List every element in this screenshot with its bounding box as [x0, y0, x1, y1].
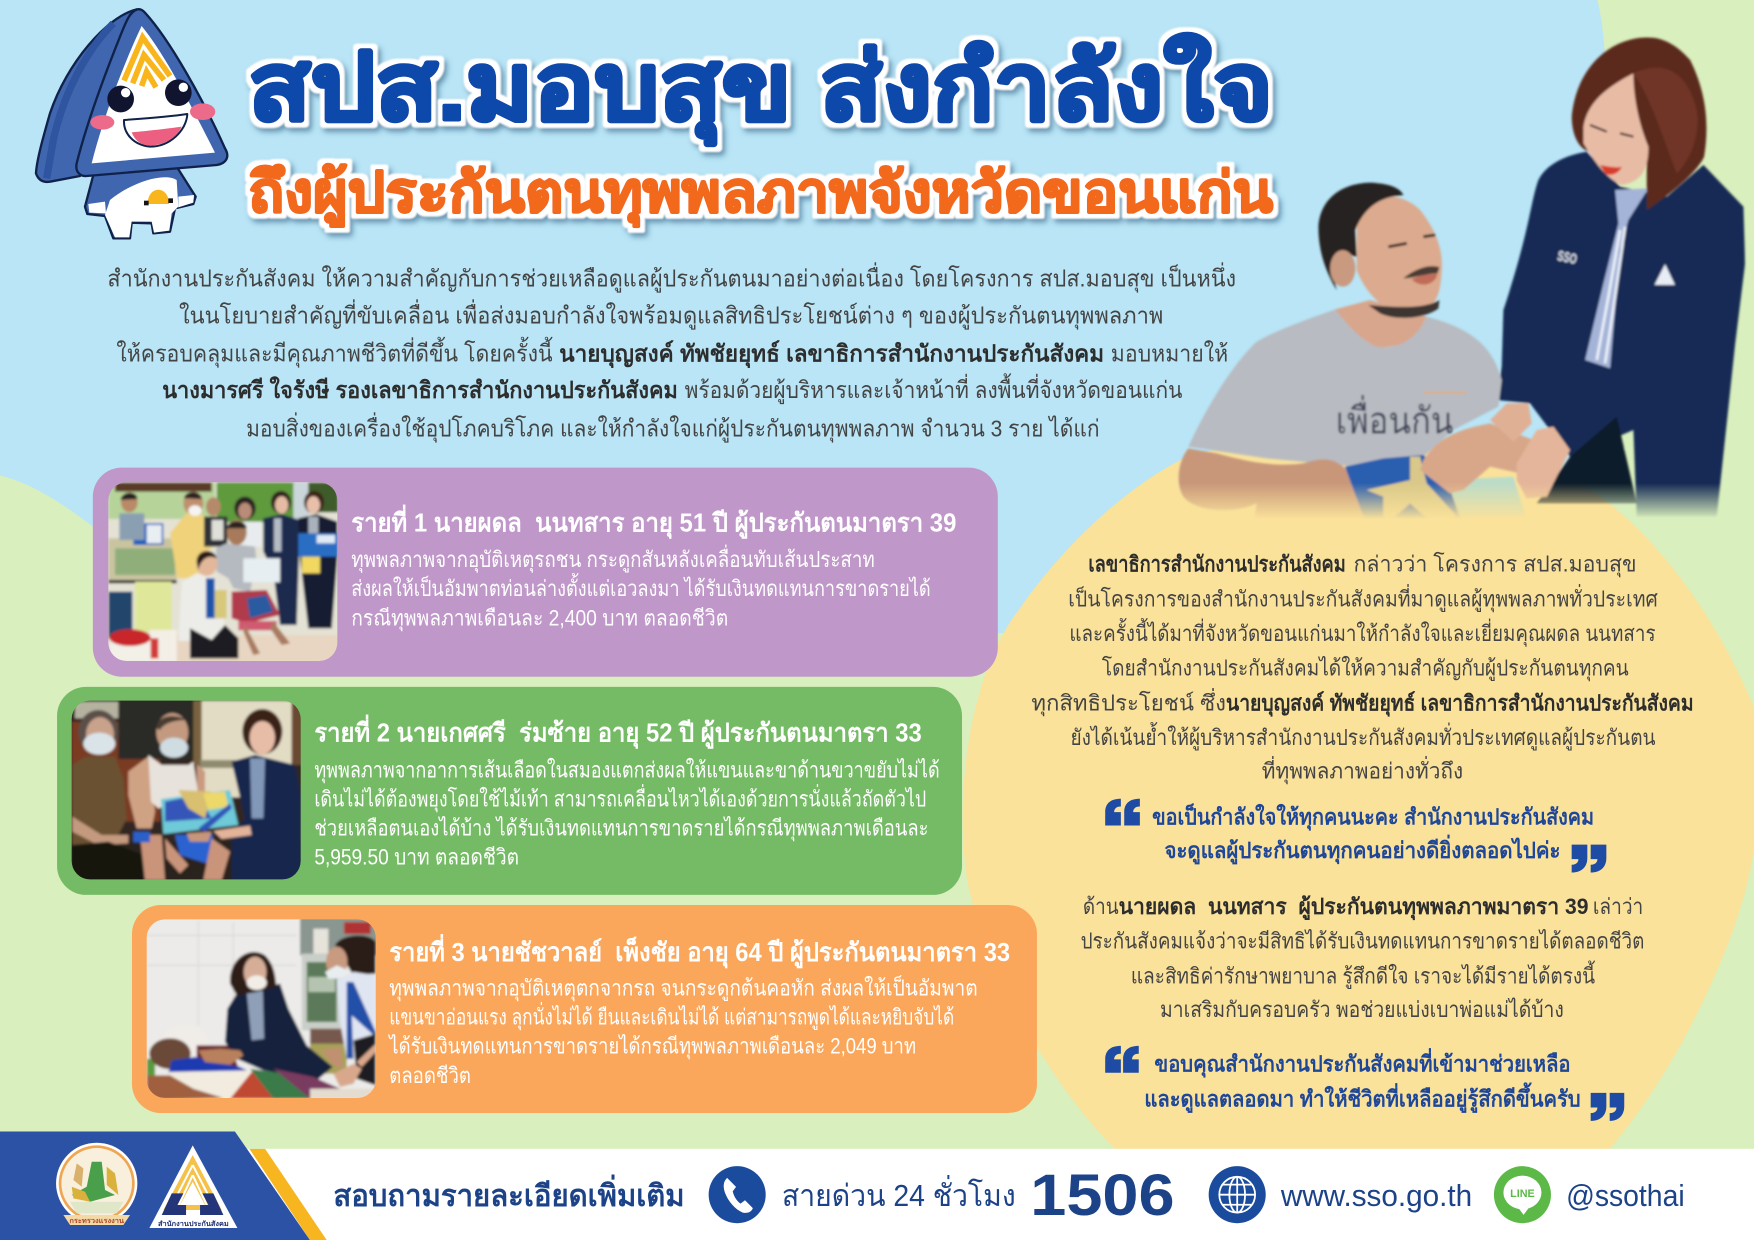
photo: case 1 group — [108, 482, 338, 661]
case 3 text: ทุพพลภาพจากอุบัติเหตุตกจากรถ จนกระดูกต้นคอหัก ส่งผลให้เป็นอัมพาต — [389, 974, 978, 1002]
mascot body — [85, 167, 196, 238]
mascot — [36, 9, 227, 238]
case 2 text: 5,959.50 บาท ตลอดชีวิต — [314, 845, 519, 870]
gift card — [1451, 476, 1524, 514]
case 2 text: ทุพพลภาพจากอาการเส้นเลือดในสมองแตกส่งผลให้แขนและขาด้านขวาขยับไม่ได้ — [314, 757, 940, 783]
case 3 heading: รายที่ 3 นายชัชวาลย์ เพ็งชัย อายุ 64 ปี ผู้ประกันตนมาตรา 33 — [389, 934, 1010, 969]
right text block: beneficiary statement: และสิทธิค่ารักษาพยาบาล รู้สึกดีใจ เราจะได้มีรายได้ตรงนี้ — [1131, 960, 1595, 989]
logo: seal — [56, 1143, 137, 1225]
icon: LINE: LINE — [1510, 1188, 1535, 1200]
woman hand lower — [1517, 427, 1570, 498]
woman hand raised — [1490, 403, 1532, 442]
photo: man in wheelchair with SSO officer — [1179, 37, 1745, 527]
case 1 text: ส่งผลให้เป็นอัมพาตท่อนล่างตั้งแต่เอวลงมา ได้รับเงินทดแทนการขาดรายได้ — [351, 573, 931, 601]
mascot face — [92, 26, 215, 163]
mascot eyes — [107, 79, 192, 112]
woman jacket — [1497, 152, 1745, 517]
right text block: beneficiary statement: มาเสริมกับครอบครัว พอช่วยแบ่งเบาพ่อแม่ได้บ้าง — [1160, 997, 1564, 1022]
intro paragraph: สำนักงานประกันสังคม ให้ความสำคัญกับการช่วยเหลือดูแลผู้ประกันตนมาอย่างต่อเนื่อง โดยโครงการ สปส.มอบสุข เป็นหนึ่ง — [107, 261, 1236, 293]
background: yellow circle — [963, 437, 1754, 1158]
hotline number: 1506 — [1030, 1163, 1175, 1228]
case 3 text: แขนขาอ่อนแรง ลุกนั่งไม่ได้ ยืนและเดินไม่ได้ แต่สามารถพูดได้และหยิบจับได้ — [389, 1003, 954, 1031]
woman face — [1583, 73, 1648, 185]
right text block: beneficiary statement: นายผดล นนทสาร ผู้ประกันตนทุพพลภาพมาตรา 39 — [1119, 894, 1588, 921]
seal text: กระทรวงแรงงาน — [69, 1218, 124, 1225]
case 2 heading: รายที่ 2 นายเกศศรี ร่มซ้าย อายุ 52 ปี ผู้ประกันตนมาตรา 33 — [314, 715, 922, 750]
hotline label: สายด่วน 24 ชั่วโมง — [782, 1175, 1016, 1213]
right text block: secretary-general statement: เป็นโครงการของสำนักงานประกันสังคมที่มาดูแลผู้ทุพพลภาพทั่วประเทศ — [1068, 584, 1658, 612]
panel: case 3 — [132, 905, 1037, 1113]
woman shirt — [1585, 188, 1648, 368]
intro paragraph — [107, 261, 1236, 443]
man neck — [1335, 300, 1427, 348]
intro paragraph: ให้ครอบคลุมและมีคุณภาพชีวิตที่ดีขึ้น โดยครั้งนี้ — [116, 336, 553, 367]
gift ribbon — [1344, 454, 1458, 518]
case 1 text: กรณีทุพพลภาพเดือนละ 2,400 บาท ตลอดชีวิต — [351, 605, 728, 631]
intro paragraph: มอบสิ่งของเครื่องใช้อุปโภคบริโภค และให้กำลังใจแก่ผู้ประกันตนทุพพลภาพ จำนวน 3 ราย ได้แก่ — [246, 411, 1100, 443]
icon: phone — [709, 1166, 766, 1223]
logo: SSO triangle — [149, 1145, 237, 1228]
mascot cap back flap — [36, 9, 137, 182]
line id: @ssothai — [1566, 1180, 1685, 1213]
panel: case 2 — [57, 687, 962, 895]
mascot chevrons — [124, 37, 170, 87]
man ear — [1330, 250, 1355, 287]
quote 2 — [1105, 1046, 1624, 1121]
right text block: secretary-general statement: โดยสำนักงานประกันสังคมได้ให้ความสำคัญกับผู้ประกันตนทุกคน — [1102, 656, 1629, 682]
jacket logo — [1654, 264, 1675, 285]
woman hair — [1572, 37, 1706, 210]
title line 1: สปส.มอบสุข ส่งกำลังใจ — [248, 34, 1273, 146]
quote 2: ขอบคุณสำนักงานประกันสังคมที่เข้ามาช่วยเหลือ — [1154, 1048, 1571, 1079]
photo: case 3 group — [146, 919, 376, 1098]
man hair — [1318, 183, 1403, 290]
case 3 text: ตลอดชีวิต — [389, 1063, 471, 1088]
right text block: beneficiary statement — [1081, 894, 1644, 1022]
footer label: สอบถามรายละเอียดเพิ่มเติม — [333, 1174, 685, 1213]
website: www.sso.go.th — [1280, 1180, 1472, 1213]
case 3 text: ได้รับเงินทดแทนการขาดรายได้กรณีทุพพลภาพเดือนละ 2,049 บาท — [388, 1034, 916, 1060]
right text block: secretary-general statement: และครั้งนี้ได้มาที่จังหวัดขอนแก่นมาให้กำลังใจและเยี่ยมคุณผดล นนทสาร — [1069, 618, 1656, 647]
man arm — [1179, 448, 1367, 527]
mascot belly emblem — [144, 190, 173, 205]
right text block: secretary-general statement: ยังได้เน้นย้ำให้ผู้บริหารสำนักงานประกันสังคมทั่วประเทศดูแลผู้ประกันตน — [1071, 722, 1656, 751]
footer blue badge — [0, 1131, 310, 1240]
intro paragraph: นายบุญสงค์ ทัพชัยยุทธ์ เลขาธิการสำนักงานประกันสังคม — [559, 340, 1104, 368]
icon: closing quote — [1572, 845, 1606, 873]
right text block: secretary-general statement: ที่ทุพพลภาพอย่างทั่วถึง — [1262, 757, 1463, 785]
background: blue area — [0, 0, 1634, 658]
right text block: secretary-general statement: กล่าวว่า โครงการ สปส.มอบสุข — [1354, 552, 1637, 578]
intro paragraph: พร้อมด้วยผู้บริหารและเจ้าหน้าที่ ลงพื้นที่จังหวัดขอนแก่น — [685, 373, 1182, 405]
case 2 text — [314, 757, 940, 870]
intro paragraph: ในนโยบายสำคัญที่ขับเคลื่อน เพื่อส่งมอบกำลังใจพร้อมดูแลสิทธิประโยชน์ต่าง ๆ ของผู้ประกันตนทุพพลภาพ — [179, 298, 1163, 330]
mascot mouth — [124, 114, 187, 147]
right text block: beneficiary statement: เล่าว่า — [1593, 894, 1643, 919]
woman lips — [1600, 165, 1622, 175]
man eyes — [1388, 235, 1435, 247]
man beard — [1368, 300, 1439, 318]
case 1 text: ทุพพลภาพจากอุบัติเหตุรถชน กระดูกสันหลังเคลื่อนทับเส้นประสาท — [351, 545, 875, 573]
case 1 heading: รายที่ 1 นายผดล นนทสาร อายุ 51 ปี ผู้ประกันตนมาตรา 39 — [351, 504, 956, 539]
shirt print text: เพื่อนกัน — [1336, 394, 1453, 441]
icon: closing quote — [1591, 1093, 1624, 1121]
right text block: secretary-general statement — [1031, 552, 1694, 785]
right text block: secretary-general statement: ทุกสิทธิประโยชน์ ซึ่ง — [1031, 688, 1226, 716]
man head — [1357, 196, 1442, 317]
icon: opening quote — [1105, 1046, 1139, 1073]
jacket SSO text: SSO — [1556, 248, 1578, 268]
intro paragraph: มอบหมายให้ — [1111, 340, 1228, 366]
footer yellow stripe — [249, 1149, 327, 1240]
quote 1: จะดูแลผู้ประกันตนทุกคนอย่างดียิ่งตลอดไปค่ะ — [1164, 834, 1560, 865]
quote 1 — [1105, 799, 1606, 873]
logo text: สำนักงานประกันสังคม — [158, 1220, 229, 1228]
case 3 text — [388, 974, 978, 1088]
icon: opening quote — [1105, 799, 1140, 826]
right text block: secretary-general statement: เลขาธิการสำนักงานประกันสังคม — [1088, 552, 1346, 577]
panel: case 1 — [93, 468, 998, 677]
photo: case 2 group — [72, 700, 301, 880]
case 2 text: เดินไม่ได้ต้องพยุงโดยใช้ไม้เท้า สามารถเคลื่อนไหวได้เองด้วยการนั่งแล้วถัดตัวไป — [314, 785, 926, 813]
icon: LINE — [1494, 1166, 1551, 1223]
case 1 text — [351, 545, 931, 631]
mascot cheeks — [90, 103, 215, 130]
quote 1: ขอเป็นกำลังใจให้ทุกคนนะคะ สำนักงานประกันสังคม — [1152, 802, 1594, 831]
quote 2: และดูแลตลอดมา ทำให้ชีวิตที่เหลืออยู่รู้สึกดีขึ้นครับ — [1144, 1081, 1581, 1113]
title line 2: ถึงผู้ประกันตนทุพพลภาพจังหวัดขอนแก่น — [248, 160, 1273, 227]
man shirt — [1188, 309, 1502, 467]
icon: globe — [1209, 1166, 1266, 1223]
intro paragraph: นางมารศรี ใจรังษี รองเลขาธิการสำนักงานประกันสังคม — [162, 376, 678, 403]
man moustache — [1403, 266, 1439, 278]
right text block: secretary-general statement: นายบุญสงค์ ทัพชัยยุทธ์ เลขาธิการสำนักงานประกันสังคม — [1226, 690, 1694, 717]
footer bar — [0, 1131, 1754, 1240]
case 2 text: ช่วยเหลือตนเองได้บ้าง ได้รับเงินทดแทนการขาดรายได้กรณีทุพพลภาพเดือนละ — [314, 816, 928, 842]
mascot cap front — [76, 9, 227, 176]
man right hand — [1420, 423, 1533, 493]
right text block: beneficiary statement: ด้าน — [1083, 894, 1119, 919]
right text block: beneficiary statement: ประกันสังคมแจ้งว่าจะมีสิทธิได้รับเงินทดแทนการขาดรายได้ตลอดชีวิต — [1081, 929, 1644, 954]
